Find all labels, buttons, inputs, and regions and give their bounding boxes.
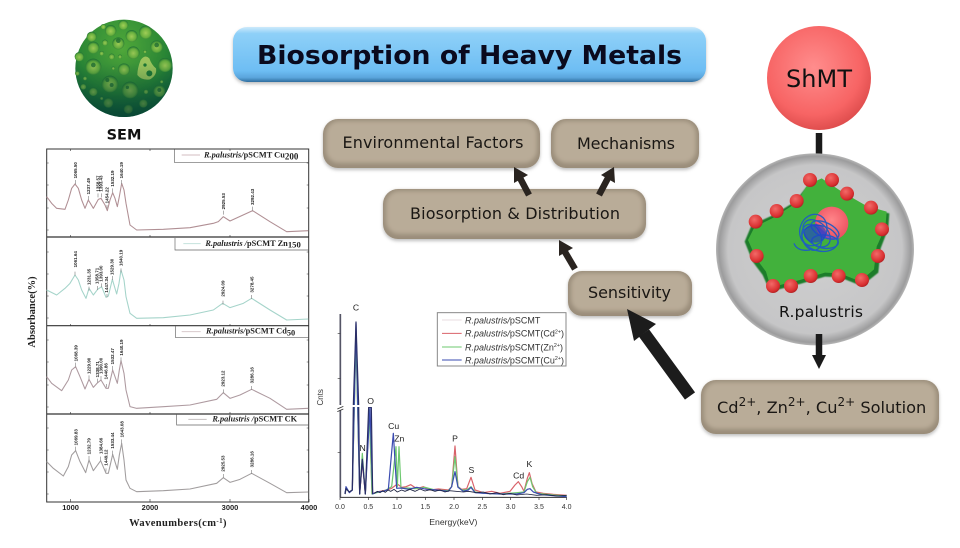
element labels: Cd	[513, 471, 524, 481]
panel: Cd50 spectrum: 1068.39	[73, 345, 78, 361]
box: metal ion solution: , Cu	[806, 398, 837, 417]
panel: Cd50 spectrum: 50	[287, 328, 295, 337]
box: Sensitivity: Sensitivity	[588, 283, 671, 302]
x axis tick labels: 3000	[222, 503, 238, 512]
x axis ticks: 4.0	[562, 504, 572, 511]
EDS legend: R.palustris/pSCMT	[465, 315, 541, 325]
panel: Cu200 spectrum: 3292.43	[250, 188, 255, 205]
panel: CK spectrum: 1643.08	[119, 421, 124, 437]
panel: Zn150 spectrum	[47, 238, 308, 320]
arrow: bacterium to solution	[812, 334, 826, 369]
panel: Cd50 spectrum: 1446.86	[103, 363, 108, 379]
box: Biosorption and Distribution	[383, 189, 646, 239]
icon: SEM green biofilm sphere	[75, 20, 173, 117]
node: ShMT: ShMT	[786, 65, 852, 93]
EDS traces	[345, 322, 567, 497]
EDS legend: R.palustris/pSCMT(Zn	[465, 342, 554, 352]
x axis tick labels: 2000	[142, 503, 158, 512]
box: metal ion solution: 2+	[788, 395, 806, 409]
title banner	[233, 27, 706, 82]
x axis tick labels	[62, 503, 317, 512]
panel: Zn150 spectrum: 1447.34	[104, 276, 109, 293]
element labels: N	[360, 443, 366, 453]
panel: CK spectrum: 1384.66	[98, 437, 103, 454]
x axis tick labels: 4000	[301, 503, 317, 512]
panel: Cu200 spectrum: 1237.49	[86, 178, 91, 194]
box: Biosorption and Distribution: Biosorption & Distribution	[410, 204, 620, 223]
SEM label: SEM	[107, 128, 141, 144]
panel: Zn150 spectrum: 150	[288, 240, 301, 250]
panel: Cu200 spectrum: 1358.57	[95, 175, 100, 192]
arrow: Biosorption to Mechanisms	[599, 167, 615, 195]
x axis ticks: 0.0	[335, 504, 345, 511]
x axis title: )	[223, 518, 227, 529]
adsorbed surface particles	[749, 173, 889, 293]
panel: Cu200 spectrum	[47, 149, 308, 232]
arrow: solution to Sensitivity	[627, 309, 690, 396]
box: metal ion solution: , Zn	[756, 398, 788, 417]
R.palustris label: R.palustris	[779, 303, 863, 321]
box: Environmental Factors	[323, 119, 540, 168]
node: ShMT	[767, 26, 871, 130]
panel: Cu200 spectrum: 2925.53	[221, 193, 226, 209]
panel: CK spectrum: R.palustris /pSCMT CK	[211, 415, 298, 424]
panel: Zn150 spectrum: R.palustris /pSCMT Zn	[205, 239, 288, 248]
x axis title: Energy(keV)	[429, 517, 478, 527]
x axis ticks: 2.5	[477, 504, 487, 511]
element labels	[353, 303, 532, 481]
panel: CK spectrum	[47, 415, 308, 493]
FTIR frame	[47, 149, 309, 502]
element labels: P	[452, 434, 458, 444]
arrow: Biosorption to Environmental Factors	[514, 167, 529, 195]
box: metal ion solution: 2+	[739, 395, 756, 409]
element labels: S	[468, 465, 474, 475]
box: metal ion solution: 2+	[837, 395, 855, 409]
panel: CK spectrum: 1232.79	[86, 438, 91, 454]
y axis title: Cnts	[316, 389, 325, 406]
panel: Cu200 spectrum: R.palustris/pSCMT Cu	[204, 151, 285, 160]
x axis ticks: 1.5	[420, 504, 430, 511]
element labels: K	[526, 459, 532, 469]
EDS legend: 2+	[555, 329, 561, 335]
panel: CK spectrum: 1449.12	[103, 449, 108, 466]
EDS axes	[337, 314, 567, 500]
chart: EDS spectra	[316, 303, 572, 527]
x axis title: -1	[216, 517, 223, 525]
chart: FTIR spectra	[27, 149, 317, 529]
box: Sensitivity	[568, 271, 692, 316]
element labels: Cu	[388, 421, 399, 431]
EDS legend: 2+	[554, 343, 560, 349]
x axis ticks: 2.0	[449, 504, 459, 511]
panel: Cu200 spectrum: 1393.43	[99, 175, 104, 192]
EDS legend: )	[561, 355, 564, 365]
panel: Cd50 spectrum: 2923.12	[221, 370, 226, 387]
panel: CK spectrum: 1069.83	[73, 429, 78, 445]
panel: Zn150 spectrum: 2924.09	[221, 280, 226, 297]
x axis title: Wavenumbers(cm	[129, 518, 216, 529]
EDS legend: )	[561, 329, 564, 339]
panel: Zn150 spectrum: 1640.19	[119, 249, 124, 266]
element labels: O	[367, 396, 374, 406]
EDS legend	[437, 313, 566, 366]
panel: Zn150 spectrum: 1358.71	[95, 267, 100, 284]
x axis tick labels: 1000	[62, 503, 79, 512]
y axis break gap	[350, 405, 373, 407]
panel: Zn150 spectrum: 1529.30	[110, 258, 115, 275]
box: Mechanisms: Mechanisms	[577, 134, 675, 153]
panel: Cd50 spectrum: 1390.00	[98, 357, 103, 374]
x axis ticks: 3.5	[534, 504, 544, 511]
panel: CK spectrum: 2925.53	[221, 455, 226, 472]
panel: Zn150 spectrum: 1061.64	[73, 251, 78, 267]
panel: Cd50 spectrum: 1338.71	[95, 361, 100, 377]
nucleus	[794, 207, 848, 255]
icon: R.palustris cell	[716, 153, 914, 345]
box: metal ion solution	[701, 380, 939, 434]
x axis ticks: 0.5	[363, 504, 373, 511]
panel: CK spectrum: 1533.44	[110, 432, 115, 449]
panel: Cd50 spectrum: 3286.16	[249, 367, 254, 383]
y axis title: Absorbance(%)	[27, 276, 38, 348]
panel: Cd50 spectrum: 1229.90	[86, 357, 91, 374]
box: Mechanisms	[551, 119, 699, 168]
panel: Cd50 spectrum: R.palustris/pSCMT Cd	[206, 327, 287, 336]
x axis ticks: 1.0	[392, 504, 402, 511]
EDS legend: R.palustris/pSCMT(Cd	[465, 329, 555, 339]
panel: Cu200 spectrum: 1532.19	[110, 170, 115, 187]
box: Environmental Factors: Environmental Factors	[342, 133, 524, 152]
arrow: ShMT to bacterium	[812, 133, 826, 168]
box: metal ion solution: Cd	[717, 398, 739, 417]
panel: Cu200 spectrum: 200	[285, 152, 299, 162]
panel: Zn150 spectrum: 1393.00	[99, 265, 104, 282]
element labels: C	[353, 303, 359, 313]
title banner: Biosorption of Heavy Metals	[257, 41, 682, 71]
panel: Cd50 spectrum: 1532.47	[110, 348, 115, 364]
panel: Cd50 spectrum: 1640.19	[119, 339, 124, 356]
box: metal ion solution: Solution	[855, 398, 926, 417]
EDS legend: R.palustris/pSCMT(Cu	[465, 355, 555, 365]
panel: Zn150 spectrum: 3278.45	[249, 276, 254, 293]
arrow: Sensitivity to Biosorption	[559, 240, 575, 269]
EDS legend: 2+	[555, 356, 561, 362]
panel: Cu200 spectrum: 1454.22	[104, 187, 109, 203]
element labels: Zn	[394, 434, 405, 444]
x axis ticks	[335, 504, 572, 511]
panel: Cu200 spectrum: 1065.50	[73, 162, 78, 178]
panel: Cd50 spectrum	[47, 326, 308, 409]
panel: Zn150 spectrum: 1231.35	[86, 268, 91, 285]
EDS legend: )	[560, 342, 563, 352]
panel: Cu200 spectrum: 1640.19	[119, 162, 124, 178]
x axis ticks: 3.0	[506, 504, 516, 511]
panel: CK spectrum: 3286.16	[249, 451, 254, 467]
cell body	[745, 178, 889, 292]
